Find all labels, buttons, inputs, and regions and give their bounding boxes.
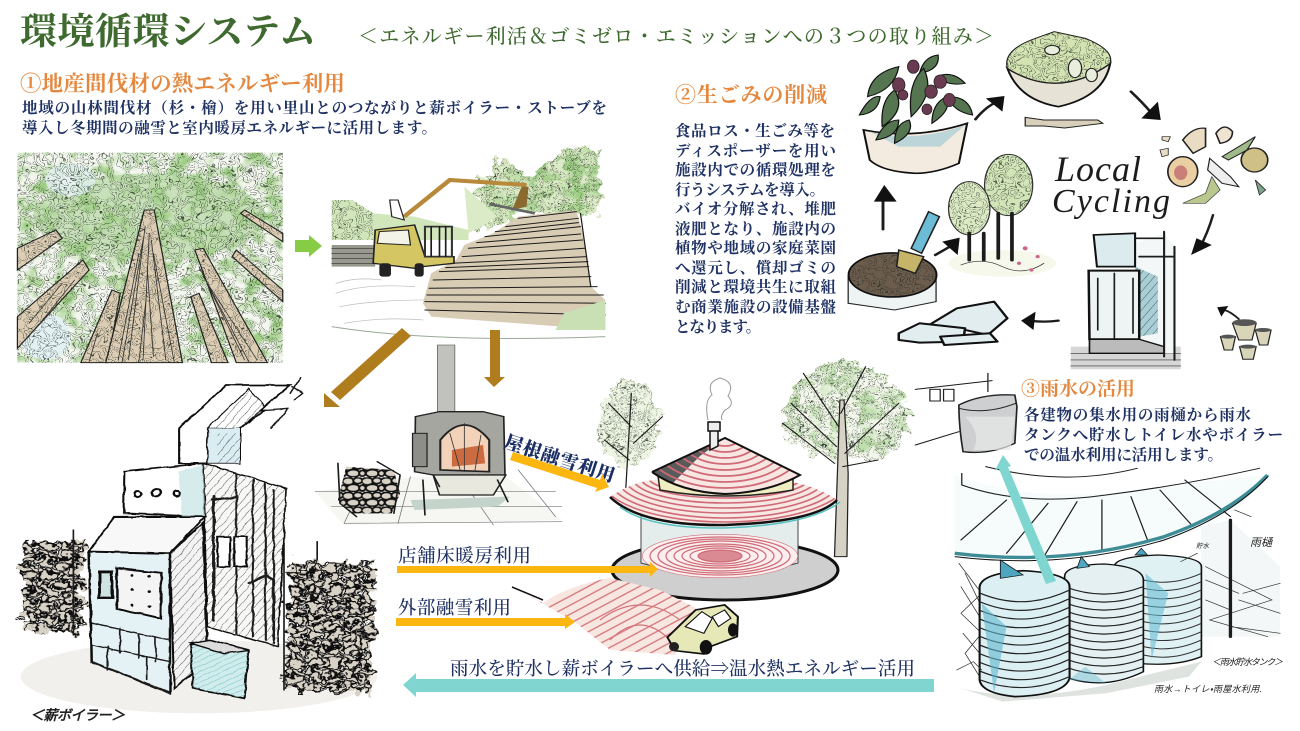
section 1 body text: 地域の山林間伐材（杉・檜）を用い里山とのつながりと薪ボイラー・ストーブを bbox=[22, 98, 607, 117]
illustration: rainwater tank on wall bbox=[915, 373, 1017, 452]
note: rainwater tank handwritten: ＜雨水貯水タンク＞ bbox=[1212, 657, 1283, 667]
water tanks bbox=[980, 548, 1201, 697]
section 3 body text: 各建物の集水用の雨樋から雨水 bbox=[1024, 405, 1251, 424]
chimney smoke bbox=[707, 378, 731, 420]
label: roof snow melting: 屋根融雪利用 bbox=[501, 431, 618, 487]
icon: brown arrow to wood boiler bbox=[331, 328, 411, 400]
title: 環境循環システム bbox=[20, 11, 316, 53]
section 2 body text: 液肥となり、施設内の bbox=[675, 219, 836, 238]
heated floor coil bbox=[642, 534, 798, 578]
illustration: compost soil stones bbox=[899, 302, 1007, 345]
illustration: cedar forest looking up bbox=[17, 153, 283, 363]
lower roof edge bbox=[610, 497, 837, 525]
illustration: wood boiler with firewood stacks bbox=[21, 377, 377, 713]
section 2 body text: む商業施設の設備基盤 bbox=[675, 297, 836, 316]
script text: Local Cycling: Local bbox=[1054, 149, 1141, 189]
label: rainwater to boiler: 雨水を貯水し薪ボイラーへ供給⇒温水熱エネルギー活用 bbox=[450, 659, 915, 680]
subtitle: ＜エネルギー利活＆ゴミゼロ・エミッションへの３つの取り組み＞ bbox=[358, 25, 994, 48]
chimney bbox=[708, 422, 720, 450]
illustration: food scraps bbox=[1160, 127, 1268, 203]
icon: brown arrow head to wood boiler bbox=[324, 393, 340, 407]
script text: Local Cycling: Cycling bbox=[1052, 183, 1170, 220]
illustration: compact car bbox=[667, 605, 738, 655]
illustration: plant in bowl bbox=[859, 55, 973, 173]
section 2 body text: ディスポーザーを用い bbox=[675, 142, 836, 160]
lower roof bbox=[611, 480, 837, 524]
illustration: wood stove bbox=[315, 345, 562, 525]
upper roof outline bbox=[652, 438, 800, 494]
section 3 heading: ③雨水の活用 bbox=[1021, 378, 1135, 400]
illustration: disposer unit bbox=[1071, 232, 1181, 369]
label: shop floor heating: 店舗床暖房利用 bbox=[398, 545, 531, 567]
arrow: tanks to rainwater wall tank bbox=[995, 455, 1056, 584]
gutter accent bbox=[620, 502, 840, 528]
section 3 body text bbox=[1024, 405, 1283, 464]
script text: Local Cycling bbox=[1052, 149, 1170, 220]
arrow: shop floor heating bbox=[397, 562, 658, 577]
illustration: small buckets bbox=[1220, 319, 1271, 359]
section 2 body text bbox=[675, 121, 836, 336]
section 2 body text: 植物や地域の家庭菜園 bbox=[675, 238, 836, 257]
illustration: heated exterior pavement bbox=[512, 578, 700, 655]
illustration: trees behind building bbox=[598, 360, 908, 557]
icon: brown arrow to wood stove bbox=[484, 330, 505, 387]
arrow: exterior snow melting bbox=[396, 614, 575, 629]
illustration: roof canopy and three water tanks bbox=[955, 467, 1280, 702]
section 2 body text: バイオ分解され、堆肥 bbox=[675, 200, 836, 218]
base disk bbox=[612, 540, 838, 600]
note: gutter handwritten: 雨樋 bbox=[1250, 536, 1274, 549]
illustration: truck loading timber logs bbox=[332, 148, 605, 339]
section 2 body text: 削減と環境共生に取組 bbox=[675, 277, 836, 296]
section 2 body text: 施設内での循環処理を bbox=[675, 160, 836, 179]
arrow: roof snow melting bbox=[510, 452, 609, 492]
cream band bbox=[658, 476, 793, 496]
note: rainwater use handwritten: 雨水→トイレ・雨屋水利用. bbox=[1154, 684, 1262, 694]
note: storage tank tiny: 貯水 bbox=[1196, 542, 1210, 550]
section 1 body text bbox=[22, 98, 607, 137]
section 2 body text: 行うシステムを導入。 bbox=[675, 181, 825, 199]
upper roof bbox=[654, 439, 798, 493]
label: exterior snow melting: 外部融雪利用 bbox=[398, 597, 511, 619]
section 3 body text: タンクへ貯水しトイレ水やボイラー bbox=[1024, 426, 1283, 444]
section 2 body text: となります。 bbox=[675, 318, 761, 336]
illustration: round building with heated roof and floor bbox=[609, 378, 840, 602]
illustration: two trees bbox=[949, 154, 1056, 277]
section 3 body text: での温水利用に活用します。 bbox=[1024, 445, 1223, 464]
arrows: recycling loop bbox=[874, 92, 1239, 330]
section 2 heading: ②生ごみの削減 bbox=[675, 83, 827, 107]
illustration: soil bowl with trowel bbox=[848, 212, 939, 310]
building wall bbox=[641, 500, 798, 574]
arrow: rainwater to boiler bbox=[403, 673, 934, 697]
icon: green arrow forest to logging bbox=[295, 235, 322, 257]
label: wood boiler handwritten: ＜薪ボイラー＞ bbox=[30, 707, 126, 723]
section 1 heading: ①地産間伐材の熱エネルギー利用 bbox=[20, 71, 345, 96]
section 2 body text: へ還元し、償却ゴミの bbox=[675, 258, 836, 277]
illustration: salad bowl and fork bbox=[1007, 32, 1111, 128]
section 1 body text: 導入し冬期間の融雪と室内暖房エネルギーに活用します。 bbox=[22, 118, 437, 137]
section 2 body text: 食品ロス・生ごみ等を bbox=[675, 121, 835, 140]
